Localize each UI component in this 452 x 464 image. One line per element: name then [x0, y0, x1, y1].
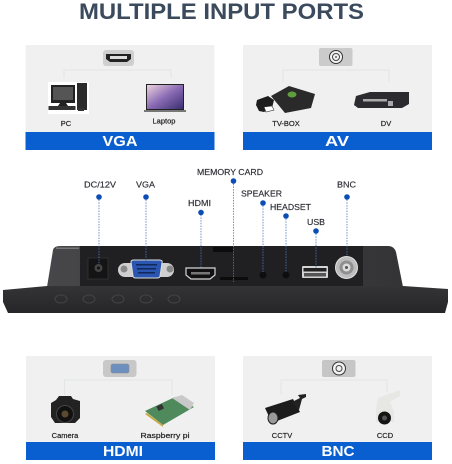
speaker jack	[260, 272, 266, 278]
label: DV: DV	[381, 119, 391, 128]
monitor rear	[3, 246, 448, 313]
panel: VGA	[26, 45, 214, 150]
banner: BNC	[243, 442, 432, 460]
HDMI port	[186, 268, 215, 279]
icon: HDMI port	[103, 50, 134, 66]
icon: camera	[51, 396, 80, 423]
port callouts: BNC	[337, 180, 356, 190]
icon: DV recorder	[354, 92, 409, 108]
connector lines	[283, 70, 389, 82]
label: CCTV: CCTV	[272, 431, 292, 440]
USB port	[302, 266, 328, 278]
port callouts: MEMORY CARD	[197, 168, 263, 177]
port recess	[80, 246, 363, 286]
port callouts	[84, 168, 356, 282]
icon: RCA port	[319, 48, 352, 66]
VGA port	[118, 260, 174, 278]
icon: laptop	[144, 84, 186, 112]
monitor front bezel	[3, 286, 448, 313]
label: TV-BOX: TV-BOX	[272, 119, 300, 128]
DC jack	[88, 258, 108, 279]
label: Laptop: Laptop	[153, 116, 175, 126]
label: Raspberry pi: Raspberry pi	[140, 431, 190, 440]
icon: PC	[48, 82, 89, 114]
panel: AV	[243, 45, 432, 150]
banner: HDMI: HDMI	[103, 443, 143, 460]
label: CCD: CCD	[377, 431, 394, 440]
side buttons	[55, 295, 180, 303]
monitor back housing	[47, 246, 403, 287]
port callouts: HEADSET	[270, 203, 311, 212]
banner: VGA: VGA	[102, 133, 138, 150]
headset jack	[282, 272, 290, 278]
memory card slot	[213, 247, 248, 280]
port callouts: DC/12V	[84, 180, 117, 190]
BNC port	[336, 256, 358, 278]
port callouts: USB	[307, 218, 325, 227]
icon: VGA port	[103, 360, 136, 377]
label: Camera: Camera	[52, 431, 79, 440]
panel: BNC	[243, 356, 432, 460]
banner: HDMI	[26, 442, 215, 460]
banner: VGA	[26, 132, 214, 150]
connector lines	[64, 70, 171, 78]
port callouts: HDMI	[188, 199, 211, 208]
port callouts: VGA	[136, 180, 156, 190]
connector lines	[281, 380, 387, 395]
banner: BNC: BNC	[322, 443, 355, 460]
banner: AV: AV	[325, 133, 349, 150]
banner: AV	[243, 132, 432, 150]
connector lines	[64, 380, 172, 395]
icon: CCD dome camera	[376, 390, 400, 424]
icon: CCTV camera	[265, 394, 306, 424]
icon: TV box	[256, 86, 315, 113]
port callouts: SPEAKER	[241, 190, 282, 198]
label: PC: PC	[61, 119, 72, 128]
panel: HDMI	[26, 356, 215, 460]
icon: BNC port	[322, 360, 356, 377]
icon: Raspberry Pi	[145, 395, 194, 427]
